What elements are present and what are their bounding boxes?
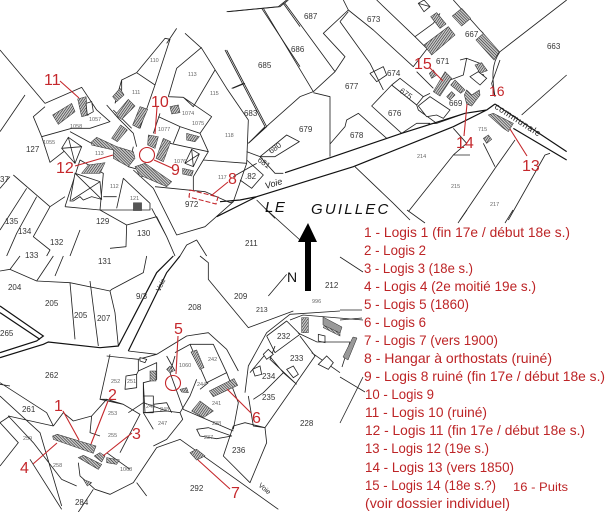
red callouts: numbers and leader lines [20, 56, 540, 502]
map labels: north-west parcels: 1058 [70, 124, 82, 130]
map labels: north-east parcels: 670 [420, 106, 434, 118]
parcel lines: south [0, 256, 147, 346]
legend: list of buildings: 5 - Logis 5 (1860) [364, 296, 469, 312]
map labels: north-west parcels: 134 [18, 227, 32, 236]
callout numbers: 11 [44, 72, 61, 89]
map labels: north-west parcels: 113 [95, 151, 104, 157]
map labels: north-west parcels: 972 [185, 200, 199, 209]
leader lines and circles [33, 67, 527, 489]
legend: list of buildings: 15 - Logis 14 (18e s.?) [365, 477, 496, 493]
map labels: north-east parcels: 215 [451, 184, 460, 190]
callout numbers: 10 [151, 94, 169, 111]
map labels: south parcels: 284 [75, 498, 89, 507]
map labels: south parcels: 241 [212, 401, 221, 407]
callout numbers: 6 [252, 410, 261, 427]
callout numbers: 12 [56, 160, 74, 177]
map labels: south parcels: 235 [262, 393, 276, 402]
legend: list of buildings: 16 - Puits [513, 480, 568, 494]
map labels: south parcels: 213 [256, 307, 268, 314]
map labels: north-west parcels: 129 [96, 217, 110, 226]
callout numbers: 8 [228, 171, 237, 188]
map labels: south parcels: 242 [208, 357, 217, 363]
map labels: south parcels: 996 [312, 299, 321, 305]
map labels: north-west parcels: 1075 [192, 121, 204, 127]
parcel lines: north-east [225, 0, 387, 157]
map labels: north-west parcels: 133 [25, 251, 39, 260]
map labels: south parcels: 1068 [120, 467, 132, 473]
map labels: north-west parcels: 127 [26, 145, 40, 154]
map labels: south parcels: 265 [0, 329, 14, 338]
map labels: north-east parcels: 715 [478, 127, 487, 133]
legend: list of buildings: 3 - Logis 3 (18e s.) [364, 260, 473, 276]
map labels: south parcels [0, 257, 339, 507]
map labels: north-east parcels: 686 [291, 45, 305, 54]
map labels: south parcels: 253 [108, 411, 117, 417]
map labels: north-west parcels: 117 [218, 175, 227, 181]
map labels: north-east parcels: 217 [490, 202, 499, 208]
north arrow: N [287, 269, 297, 285]
map labels: south parcels: 244 [197, 382, 206, 388]
map labels: south parcels: 234 [262, 372, 276, 381]
callout numbers: 16 [489, 83, 505, 99]
callout numbers: 15 [414, 56, 432, 73]
map labels: north-west parcels [0, 58, 258, 260]
map labels: north-east parcels: 676 [388, 109, 402, 118]
map labels: north-west parcels: 118 [225, 133, 234, 139]
callout numbers: 4 [20, 460, 29, 477]
map labels: south parcels: 204 [8, 283, 22, 292]
map labels: north-east parcels [245, 12, 561, 218]
callout numbers: 1 [54, 398, 63, 415]
map labels: north-east parcels: communale [493, 101, 543, 139]
map labels: south parcels: 232 [277, 332, 291, 341]
map labels: south parcels: 209 [234, 292, 248, 301]
map labels: north-west parcels: 1074 [182, 111, 194, 117]
map labels: north-west parcels: 1076 [174, 159, 186, 165]
map labels: north-west parcels: 683 [244, 109, 258, 118]
map labels: north-west parcels: 1055 [43, 140, 55, 146]
map labels: south parcels: 249 [146, 404, 155, 410]
legend: list of buildings: 9 - Logis 8 ruiné (fin 17e / début 18e s.) [364, 368, 605, 384]
map labels: north-east parcels: GUILLEC [311, 201, 391, 218]
map labels: north-east parcels: 669 [449, 99, 463, 108]
map labels: north-east parcels: 214 [417, 154, 426, 160]
map labels: north-east parcels: 677 [345, 82, 359, 91]
map labels: south parcels: 9/3 [136, 292, 148, 301]
buildings: north-east [418, 0, 513, 143]
map labels: south parcels: 212 [325, 281, 339, 290]
map labels: south parcels: 262 [45, 371, 59, 380]
callout numbers: 14 [456, 135, 474, 152]
map labels: south parcels: 292 [190, 484, 204, 493]
buildings: north-west [53, 88, 199, 211]
eastern cluster and lines behind legend [290, 210, 513, 423]
map labels: south parcels: 248 [160, 407, 169, 413]
legend: list of buildings: 12 - Logis 11 (fin 17e / début 18e s.) [365, 422, 585, 438]
map labels: south parcels: 207 [97, 314, 111, 323]
map labels: north-east parcels: 678 [350, 131, 364, 140]
map labels: north-east parcels: 681 [256, 155, 272, 171]
map labels: north-west parcels: 130 [137, 229, 151, 238]
map labels: south parcels: 252 [111, 379, 120, 385]
map labels: north-west parcels: 111 [132, 90, 140, 96]
callout numbers: 7 [231, 485, 240, 502]
legend: list of buildings: 11 - Logis 10 (ruiné) [365, 404, 487, 420]
callout numbers: 9 [171, 162, 180, 179]
cadastral map: north-east hamlet [217, 0, 567, 220]
map labels: north-east parcels: 673 [367, 15, 381, 24]
map labels: south parcels: 255 [108, 433, 117, 439]
north arrow [287, 223, 317, 291]
parcel lines: north-west [0, 50, 137, 162]
callout numbers: 2 [108, 387, 117, 404]
map labels: north-east parcels: 687 [304, 12, 318, 21]
map labels: south parcels: 261 [22, 405, 36, 414]
map labels: north-east parcels: 668 [473, 74, 485, 81]
legend: list of buildings: 4 - Logis 4 (2e moitié 19e s.) [364, 278, 536, 294]
map labels: north-east parcels: 685 [258, 61, 272, 70]
legend: list of buildings: 13 - Logis 12 (19e s.) [365, 440, 489, 456]
map labels: north-east parcels: .82 [245, 172, 257, 181]
map labels: north-west parcels: 121 [130, 196, 139, 202]
buildings: south [53, 318, 340, 486]
map labels: north-west parcels: 37 [0, 175, 9, 184]
legend: list of buildings: 2 - Logis 2 [364, 242, 426, 258]
map labels: north-west parcels: 113 [188, 72, 197, 78]
map labels: south parcels: 259 [23, 436, 32, 442]
map labels: south parcels: 236 [232, 446, 246, 455]
map labels: north-east parcels: 675 [398, 86, 414, 102]
map labels: north-west parcels: 115 [210, 91, 219, 97]
map labels: north-west parcels: 1077 [158, 127, 170, 133]
legend: list of buildings: (voir dossier individuel) [365, 495, 510, 511]
map labels: south parcels: 205 [45, 299, 59, 308]
legend: list of buildings: 10 - Logis 9 [365, 386, 434, 402]
legend: list of buildings: 14 - Logis 13 (vers 1850) [365, 459, 514, 475]
map labels: south parcels: 131 [98, 257, 112, 266]
map labels: south parcels: 1060 [179, 363, 191, 369]
map labels: north-east parcels: 671 [436, 57, 450, 66]
map labels: north-east parcels: 667 [465, 30, 479, 39]
map labels: north-west parcels: 132 [50, 238, 64, 247]
cadastral map: north-west hamlet [0, 0, 300, 260]
map labels: south parcels: 208 [188, 303, 202, 312]
map labels: north-east parcels: Voie [264, 176, 283, 191]
legend: list of buildings [364, 224, 605, 511]
map labels: south parcels: 237 [204, 435, 213, 441]
map labels: north-east parcels: LE [265, 199, 286, 216]
map labels: north-east parcels: 680 [267, 140, 284, 156]
map labels: south parcels: 238 [212, 421, 221, 427]
map labels: north-east parcels: 679 [299, 125, 313, 134]
legend: list of buildings: 6 - Logis 6 [364, 314, 426, 330]
map labels: south parcels: 258 [53, 463, 62, 469]
legend: list of buildings: 8 - Hangar à orthostats (ruiné) [364, 350, 552, 366]
map labels: south parcels: Voie [155, 277, 168, 293]
map labels: north-west parcels: 110 [150, 58, 159, 64]
callout numbers [20, 56, 540, 502]
map labels: south parcels: 228 [300, 419, 314, 428]
map labels: north-west parcels: 211 [245, 239, 258, 248]
map labels: north-west parcels: 112 [110, 184, 119, 190]
map labels: south parcels: 233 [290, 354, 304, 363]
map labels: south parcels: 251 [127, 379, 136, 385]
callout numbers: 13 [522, 158, 540, 175]
legend: list of buildings: 7 - Logis 7 (vers 1900) [364, 332, 498, 348]
callout numbers: 5 [174, 321, 183, 338]
map labels: north-east parcels: 663 [547, 42, 561, 51]
legend: list of buildings: 1 - Logis 1 (fin 17e / début 18e s.) [364, 224, 570, 240]
map labels: north-west parcels: 1057 [89, 117, 101, 123]
map labels: north-west parcels: 135 [5, 217, 19, 226]
map labels: south parcels: 205 [74, 311, 88, 320]
map labels: south parcels: Voie [257, 482, 272, 496]
map labels: south parcels: 247 [158, 421, 167, 427]
map labels: north-east parcels: 674 [387, 69, 401, 78]
cadastral map: south hamlet [0, 256, 340, 512]
callout numbers: 3 [132, 426, 141, 443]
